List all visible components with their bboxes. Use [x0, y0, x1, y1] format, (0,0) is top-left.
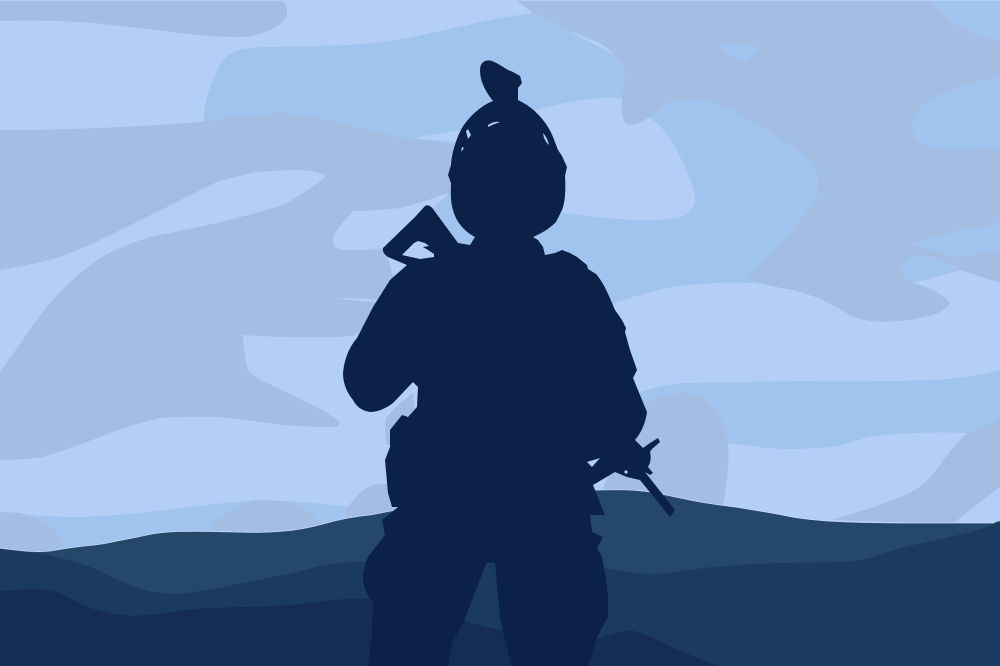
camouflage: mid-blue upper patch	[204, 13, 830, 320]
camouflage: mid-blue lower sliver at right	[900, 257, 960, 283]
camouflage: grey left-middle patch	[0, 113, 458, 460]
horizon: grey bump centre-left	[213, 500, 320, 535]
rifle receiver hole	[624, 470, 628, 474]
camouflage: mid-blue top-right corner	[928, 1, 1000, 43]
hills: middle ridge	[0, 522, 1000, 666]
helmet highlights	[461, 122, 549, 152]
hills: far ridge	[0, 490, 1000, 666]
soldier silhouette with rifle	[343, 60, 675, 666]
hills: near ridge	[0, 589, 717, 666]
camouflage: grey blob behind rifle	[600, 393, 728, 505]
horizon: grey bump by soldier	[347, 484, 395, 518]
horizon: mid-blue band on the left	[0, 500, 400, 560]
camouflage: mid-blue right band	[640, 370, 1000, 449]
camouflage: mid-blue sliver at right	[910, 223, 1000, 257]
camouflage: mid-blue patch at far right	[912, 75, 1000, 150]
camouflage: light blob right of head	[413, 98, 695, 220]
camouflage: grey top-right patch	[517, 1, 1000, 322]
camouflage: thin light streak	[337, 298, 380, 302]
camouflage: grey top-left patch	[0, 1, 287, 37]
body, helmet and rifles	[343, 60, 675, 666]
horizon: grey bump far left	[0, 512, 63, 554]
camouflage: grey lower-right patch	[830, 417, 1000, 524]
camouflage: small mid-blue patch in grey	[715, 43, 760, 63]
camouflage: grey patch behind pouch	[385, 393, 415, 445]
